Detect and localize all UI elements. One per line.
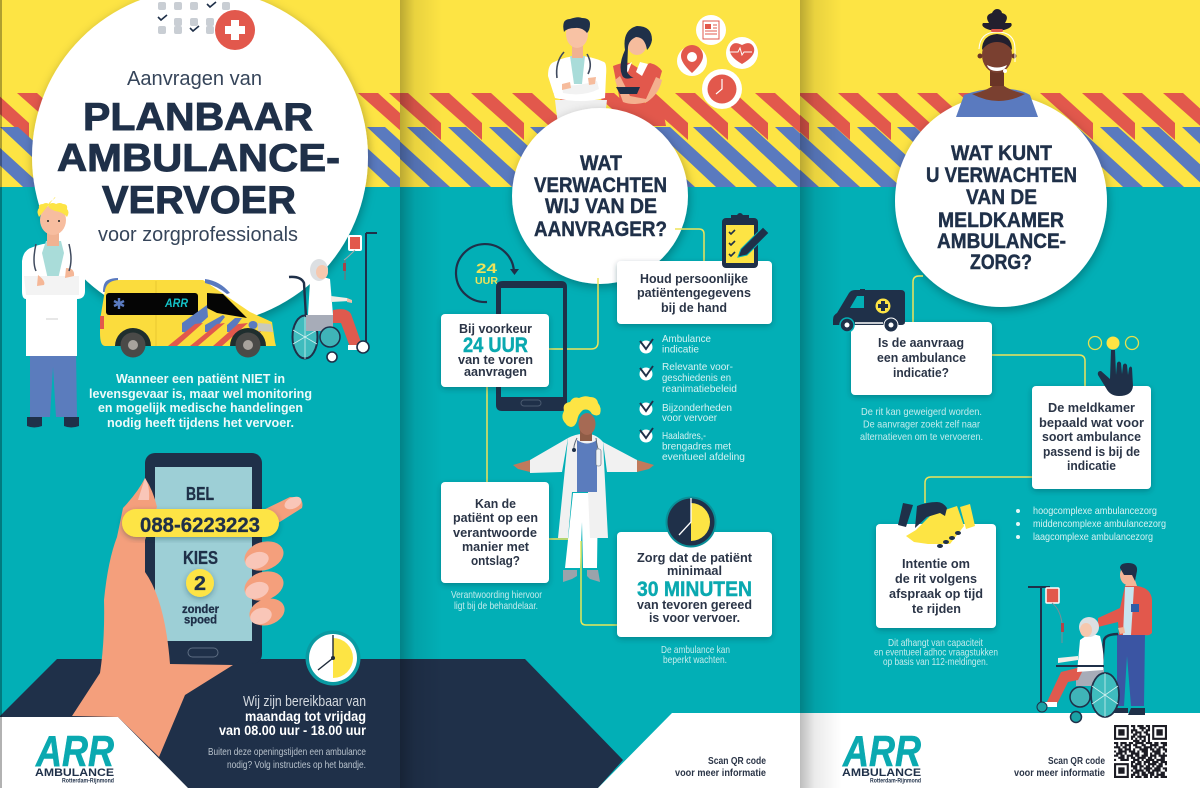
panel: right, expectations of dispatch xyxy=(800,0,1200,788)
white title circle xyxy=(32,0,368,325)
illustration: phone in hand xyxy=(72,453,303,757)
illustration: doctor xyxy=(22,197,85,428)
text: scan QR: Scan QR code xyxy=(708,756,766,767)
callout: 30 minuten: 30 MINUTEN xyxy=(637,578,752,601)
logo: ARR ambulance: Rotterdam-Rijnmond xyxy=(870,778,921,784)
illustration: doctor arms spread xyxy=(513,396,654,582)
navy shape xyxy=(400,659,623,788)
heading: VERWACHTEN xyxy=(534,174,667,197)
illustration: ambulance xyxy=(100,278,276,358)
panel: middle, expectations of requester xyxy=(400,0,800,788)
illustration: ambulance: ARR xyxy=(164,296,188,310)
list: ambulance types: hoogcomplexe ambulancezorg xyxy=(1033,505,1157,517)
text: scan QR: Scan QR code xyxy=(1048,756,1105,767)
callout: on-time intention xyxy=(876,524,996,628)
note: waiting: De ambulance kan xyxy=(661,644,730,656)
title: Aanvragen van xyxy=(127,68,262,90)
icon: phone with 24 hour arrow: UUR xyxy=(475,276,499,287)
callout: on-time intention: afspraak op tijd xyxy=(889,586,983,601)
illustration: phone in hand: zonder xyxy=(182,602,219,616)
callout: indication question: indicatie? xyxy=(893,365,949,380)
icon: phone with 24 hour arrow: 24 xyxy=(476,260,497,276)
illustration: phone in hand: BEL xyxy=(186,484,214,504)
illustration: phone in hand: spoed xyxy=(184,612,217,626)
icon: handshake xyxy=(898,502,975,548)
logo: ARR ambulance xyxy=(34,736,114,784)
white logo corner xyxy=(0,717,188,788)
callout: 30 minuten xyxy=(617,532,772,637)
callout: 30 minuten: is voor vervoer. xyxy=(649,610,740,625)
white QR corner xyxy=(598,713,800,788)
callout: on-time intention: te rijden xyxy=(912,601,961,616)
checklist: Relevante voor- xyxy=(662,361,733,373)
checklist: indicatie xyxy=(662,344,699,356)
checklist: reanimatiebeleid xyxy=(662,383,737,395)
icon: clock navy xyxy=(666,496,716,548)
checklist: Haaladres,- xyxy=(662,430,706,442)
logo: ARR ambulance: ARR xyxy=(842,727,921,776)
note: waiting xyxy=(662,646,730,665)
callout: 30 minuten: minimaal xyxy=(667,563,722,578)
text: scan QR: voor meer informatie xyxy=(1014,768,1105,779)
icons: medical info bubbles xyxy=(677,15,758,109)
title: voor zorgprofessionals xyxy=(98,224,298,246)
stripe band middle xyxy=(400,93,800,187)
heading: AMBULANCE- xyxy=(937,230,1066,253)
callout: 24 uur: van te voren xyxy=(458,352,533,367)
heading xyxy=(534,152,667,241)
list: ambulance types xyxy=(1016,505,1166,543)
checklist: eventueel afdeling xyxy=(662,451,745,463)
icon: ambulance van xyxy=(833,289,905,332)
phone number pill xyxy=(122,509,279,537)
text block: opening hours: nodig? Volg instructies op het bandje. xyxy=(227,759,366,771)
checklist: Bijzonderheden xyxy=(662,402,732,414)
text block: intro: en mogelijk medische handelingen xyxy=(98,400,303,415)
callout: dispatch decision: De meldkamer xyxy=(1048,400,1135,415)
illustration: caregiver with patient in wheelchair xyxy=(1028,563,1152,722)
callout: discharge question xyxy=(441,482,549,583)
note: refusal: alternatieven om te vervoeren. xyxy=(860,431,983,443)
callout: dispatch decision: passend is bij de xyxy=(1043,444,1140,459)
text block: opening hours: van 08.00 uur - 18.00 uur xyxy=(219,722,366,738)
icon: calendar with medical cross xyxy=(158,2,255,50)
text block: intro: nodig heeft tijdens het vervoer. xyxy=(107,415,294,430)
callout: discharge question: manier met xyxy=(462,539,530,554)
connector over trousers xyxy=(581,541,617,625)
callout: patient data xyxy=(617,261,772,324)
heading: WAT xyxy=(580,152,622,175)
callout: 24 uur: 24 UUR xyxy=(463,334,528,357)
icon: clipboard xyxy=(722,213,769,268)
number badge: 2 xyxy=(194,573,206,595)
callout: patient data: patiëntengegevens xyxy=(637,285,751,300)
illustration: phone in hand: KIES xyxy=(183,548,218,568)
callout: on-time intention: Intentie om xyxy=(902,556,970,571)
text: scan QR xyxy=(1014,756,1105,779)
logo: ARR ambulance: AMBULANCE xyxy=(35,767,114,779)
title xyxy=(57,68,340,246)
callout: dispatch decision: indicatie xyxy=(1067,458,1116,473)
note: capacity xyxy=(874,637,998,668)
stripe band right xyxy=(735,93,1200,187)
heading: WIJ VAN DE xyxy=(545,195,657,218)
illustration: dispatcher with headset xyxy=(956,9,1038,117)
text: scan QR xyxy=(675,756,766,776)
callout: patient data: Houd persoonlijke xyxy=(640,271,748,286)
callout: on-time intention: de rit volgens xyxy=(895,571,977,586)
illustration: doctor and nurse xyxy=(548,17,666,126)
checklist: voor vervoer xyxy=(662,412,717,424)
note: responsibility: ligt bij de behandelaar. xyxy=(454,600,538,612)
logo: ARR ambulance: AMBULANCE xyxy=(842,767,921,779)
heading: AANVRAGER? xyxy=(534,218,667,241)
note: refusal: De rit kan geweigerd worden. xyxy=(861,406,982,418)
title: PLANBAAR xyxy=(83,96,313,139)
note: refusal xyxy=(860,406,983,443)
text block: opening hours: Wij zijn bereikbaar van xyxy=(243,693,366,710)
white question circle xyxy=(512,108,688,284)
note: responsibility xyxy=(451,590,542,611)
logo: ARR ambulance: Rotterdam-Rijnmond xyxy=(62,778,114,784)
connectors middle xyxy=(487,229,704,539)
stripe band left xyxy=(0,93,400,187)
checklist: geschiedenis en xyxy=(662,372,731,384)
title: AMBULANCE- xyxy=(57,137,340,180)
note: capacity: Dit afhangt van capaciteit xyxy=(888,637,983,649)
callout: 24 uur xyxy=(441,314,549,387)
callout: discharge question: verantwoorde xyxy=(453,525,537,540)
heading: MELDKAMER xyxy=(938,209,1064,232)
callout: discharge question: ontslag? xyxy=(471,553,520,568)
text block: opening hours xyxy=(208,693,366,771)
QR code xyxy=(1114,725,1167,778)
checklist xyxy=(640,333,745,463)
icon: clock xyxy=(306,630,360,686)
note: responsibility: Verantwoording hiervoor xyxy=(451,589,542,601)
note: capacity: op basis van 112-meldingen. xyxy=(883,656,988,668)
text block: opening hours: maandag tot vrijdag xyxy=(245,708,366,724)
navy floor shape xyxy=(0,659,400,788)
text block: intro xyxy=(89,371,312,430)
callout: patient data: bij de hand xyxy=(661,300,727,315)
callout: dispatch decision: bepaald wat voor xyxy=(1039,415,1144,430)
heading: VAN DE xyxy=(966,186,1037,209)
white question circle xyxy=(895,95,1107,307)
connectors right xyxy=(913,276,1085,503)
logo: ARR ambulance: ARR xyxy=(35,727,114,776)
note: waiting: beperkt wachten. xyxy=(663,654,727,666)
callout: 30 minuten: Zorg dat de patiënt xyxy=(637,550,753,565)
phone number pill: 088-6223223 xyxy=(140,514,260,537)
note: refusal: De aanvrager zoekt zelf naar xyxy=(863,418,980,430)
heading: WAT KUNT xyxy=(951,142,1052,165)
text: scan QR: voor meer informatie xyxy=(675,768,766,779)
callout: 24 uur: aanvragen xyxy=(464,364,527,379)
callout: 24 uur: Bij voorkeur xyxy=(459,321,532,336)
number badge xyxy=(186,569,214,597)
illustration: patient in wheelchair with IV xyxy=(289,233,377,362)
panel: left cover xyxy=(0,0,400,788)
text block: opening hours: Buiten deze openingstijden een ambulance xyxy=(208,746,366,758)
callout: indication question: Is de aanvraag xyxy=(878,335,964,350)
title: VERVOER xyxy=(102,179,296,222)
callout: discharge question: patiënt op een xyxy=(453,510,538,525)
checklist: brengadres met xyxy=(662,440,731,452)
checklist: Ambulance xyxy=(662,333,711,345)
icon: phone with 24 hour arrow xyxy=(456,244,567,411)
callout: indication question xyxy=(851,322,992,395)
callout: discharge question: Kan de xyxy=(475,496,516,511)
icon: hand pressing button xyxy=(1088,336,1138,396)
text block: intro: levensgevaar is, maar wel monitoring xyxy=(89,386,312,401)
callout: dispatch decision: soort ambulance xyxy=(1042,429,1141,444)
list: ambulance types: laagcomplexe ambulancezorg xyxy=(1033,531,1153,543)
callout: dispatch decision xyxy=(1032,386,1151,489)
heading: ZORG? xyxy=(970,251,1032,274)
heading: U VERWACHTEN xyxy=(926,164,1077,187)
heading xyxy=(926,142,1077,274)
text block: intro: Wanneer een patiënt NIET in xyxy=(116,371,285,386)
list: ambulance types: middencomplexe ambulancezorg xyxy=(1033,518,1166,530)
note: capacity: en eventueel adhoc vraagstukken xyxy=(874,646,998,658)
callout: indication question: een ambulance xyxy=(877,350,966,365)
callout: 30 minuten: van tevoren gereed xyxy=(637,597,752,612)
